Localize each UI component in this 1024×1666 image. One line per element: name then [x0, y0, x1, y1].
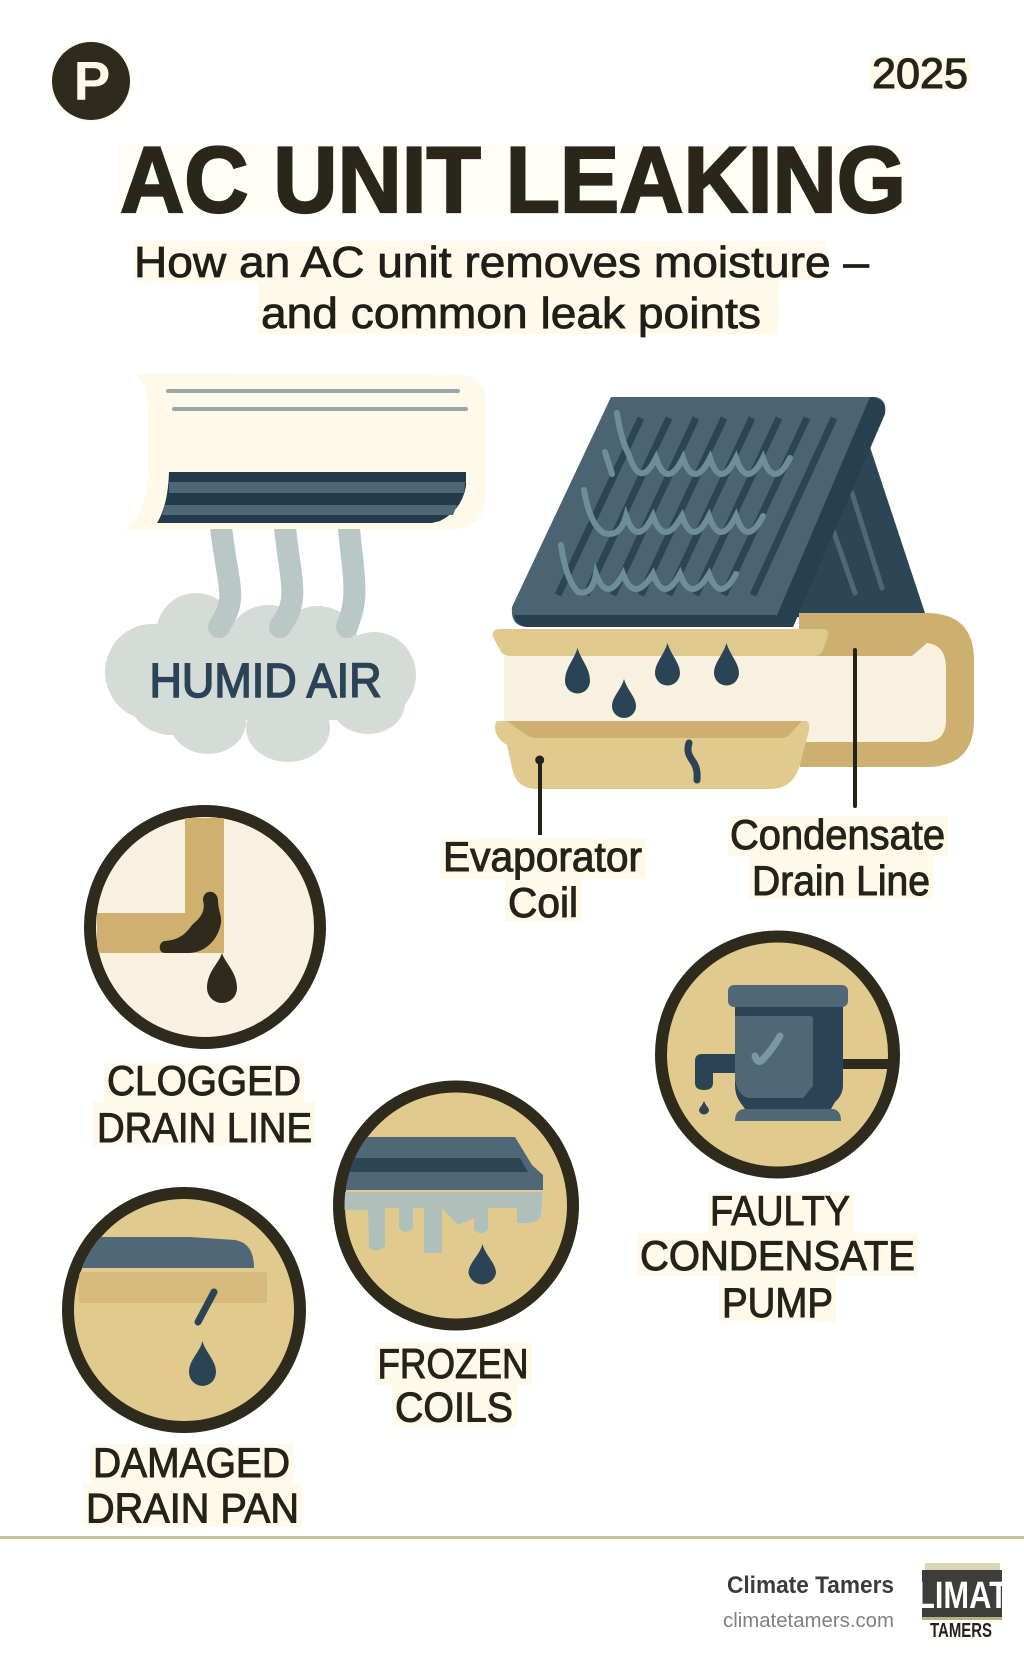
label	[637, 1187, 918, 1326]
footer brand text: Climate Tamers	[727, 1572, 894, 1599]
louver	[157, 472, 466, 523]
label	[93, 1057, 315, 1151]
label: evaporator coil: Evaporator	[443, 833, 642, 880]
drain line loop	[504, 613, 974, 767]
lower drain pan	[495, 721, 809, 789]
title: AC UNIT LEAKING	[120, 127, 906, 232]
badge: P	[50, 40, 132, 122]
callout: clogged drain line	[90, 811, 320, 1151]
icon: frozen coil	[330, 1086, 573, 1324]
water drops	[565, 643, 739, 718]
footer brand text: climatetamers.com	[723, 1609, 894, 1632]
label: COILS	[395, 1384, 513, 1430]
label: CONDENSATE	[640, 1232, 915, 1279]
label: condensate drain line: Drain Line	[752, 857, 930, 904]
unit body	[124, 373, 486, 529]
icon: pump	[661, 936, 894, 1172]
label: FROZEN	[378, 1340, 528, 1387]
leader line: condensate drain	[853, 648, 857, 808]
label: condensate drain line: Condensate	[730, 811, 945, 858]
subtitle	[134, 238, 870, 338]
footer divider	[0, 1536, 1024, 1539]
label: DRAIN LINE	[97, 1104, 312, 1151]
callout: frozen coils	[330, 1086, 573, 1430]
label: CLOGGED	[107, 1057, 301, 1104]
callout: faulty condensate pump	[637, 936, 918, 1326]
footer logo: TAMERS	[930, 1620, 992, 1642]
panel: wall AC unit	[124, 373, 486, 529]
callout: damaged drain pan	[60, 1193, 302, 1532]
label: evaporator coil	[440, 833, 646, 926]
air streams	[219, 515, 354, 627]
badge: P: P	[74, 50, 110, 112]
label: DAMAGED	[93, 1439, 290, 1486]
icon: clogged pipe	[90, 811, 320, 1043]
cloud: humid air: HUMID AIR	[150, 655, 382, 708]
upper drain pan	[493, 629, 828, 656]
label: condensate drain line	[728, 811, 948, 904]
label: DRAIN PAN	[86, 1484, 299, 1532]
panel: evaporator assembly	[493, 397, 974, 789]
condensation waves	[561, 413, 790, 593]
year: 2025	[872, 50, 968, 98]
label: evaporator coil: Coil	[508, 879, 578, 926]
coil fins	[558, 418, 834, 595]
footer logo	[922, 1563, 1002, 1637]
label: FAULTY	[710, 1187, 850, 1234]
subtitle: and common leak points	[261, 289, 761, 338]
cloud: humid air	[105, 515, 416, 762]
coil rear support	[770, 425, 925, 618]
top slots	[166, 389, 468, 411]
footer brand text	[723, 1572, 894, 1632]
label	[83, 1439, 302, 1532]
icon: cracked pan	[60, 1193, 300, 1427]
subtitle: How an AC unit removes moisture –	[134, 238, 870, 287]
leader line: evaporator coil	[535, 756, 544, 835]
label	[375, 1340, 532, 1430]
label: PUMP	[722, 1279, 833, 1326]
coil block	[512, 397, 885, 627]
